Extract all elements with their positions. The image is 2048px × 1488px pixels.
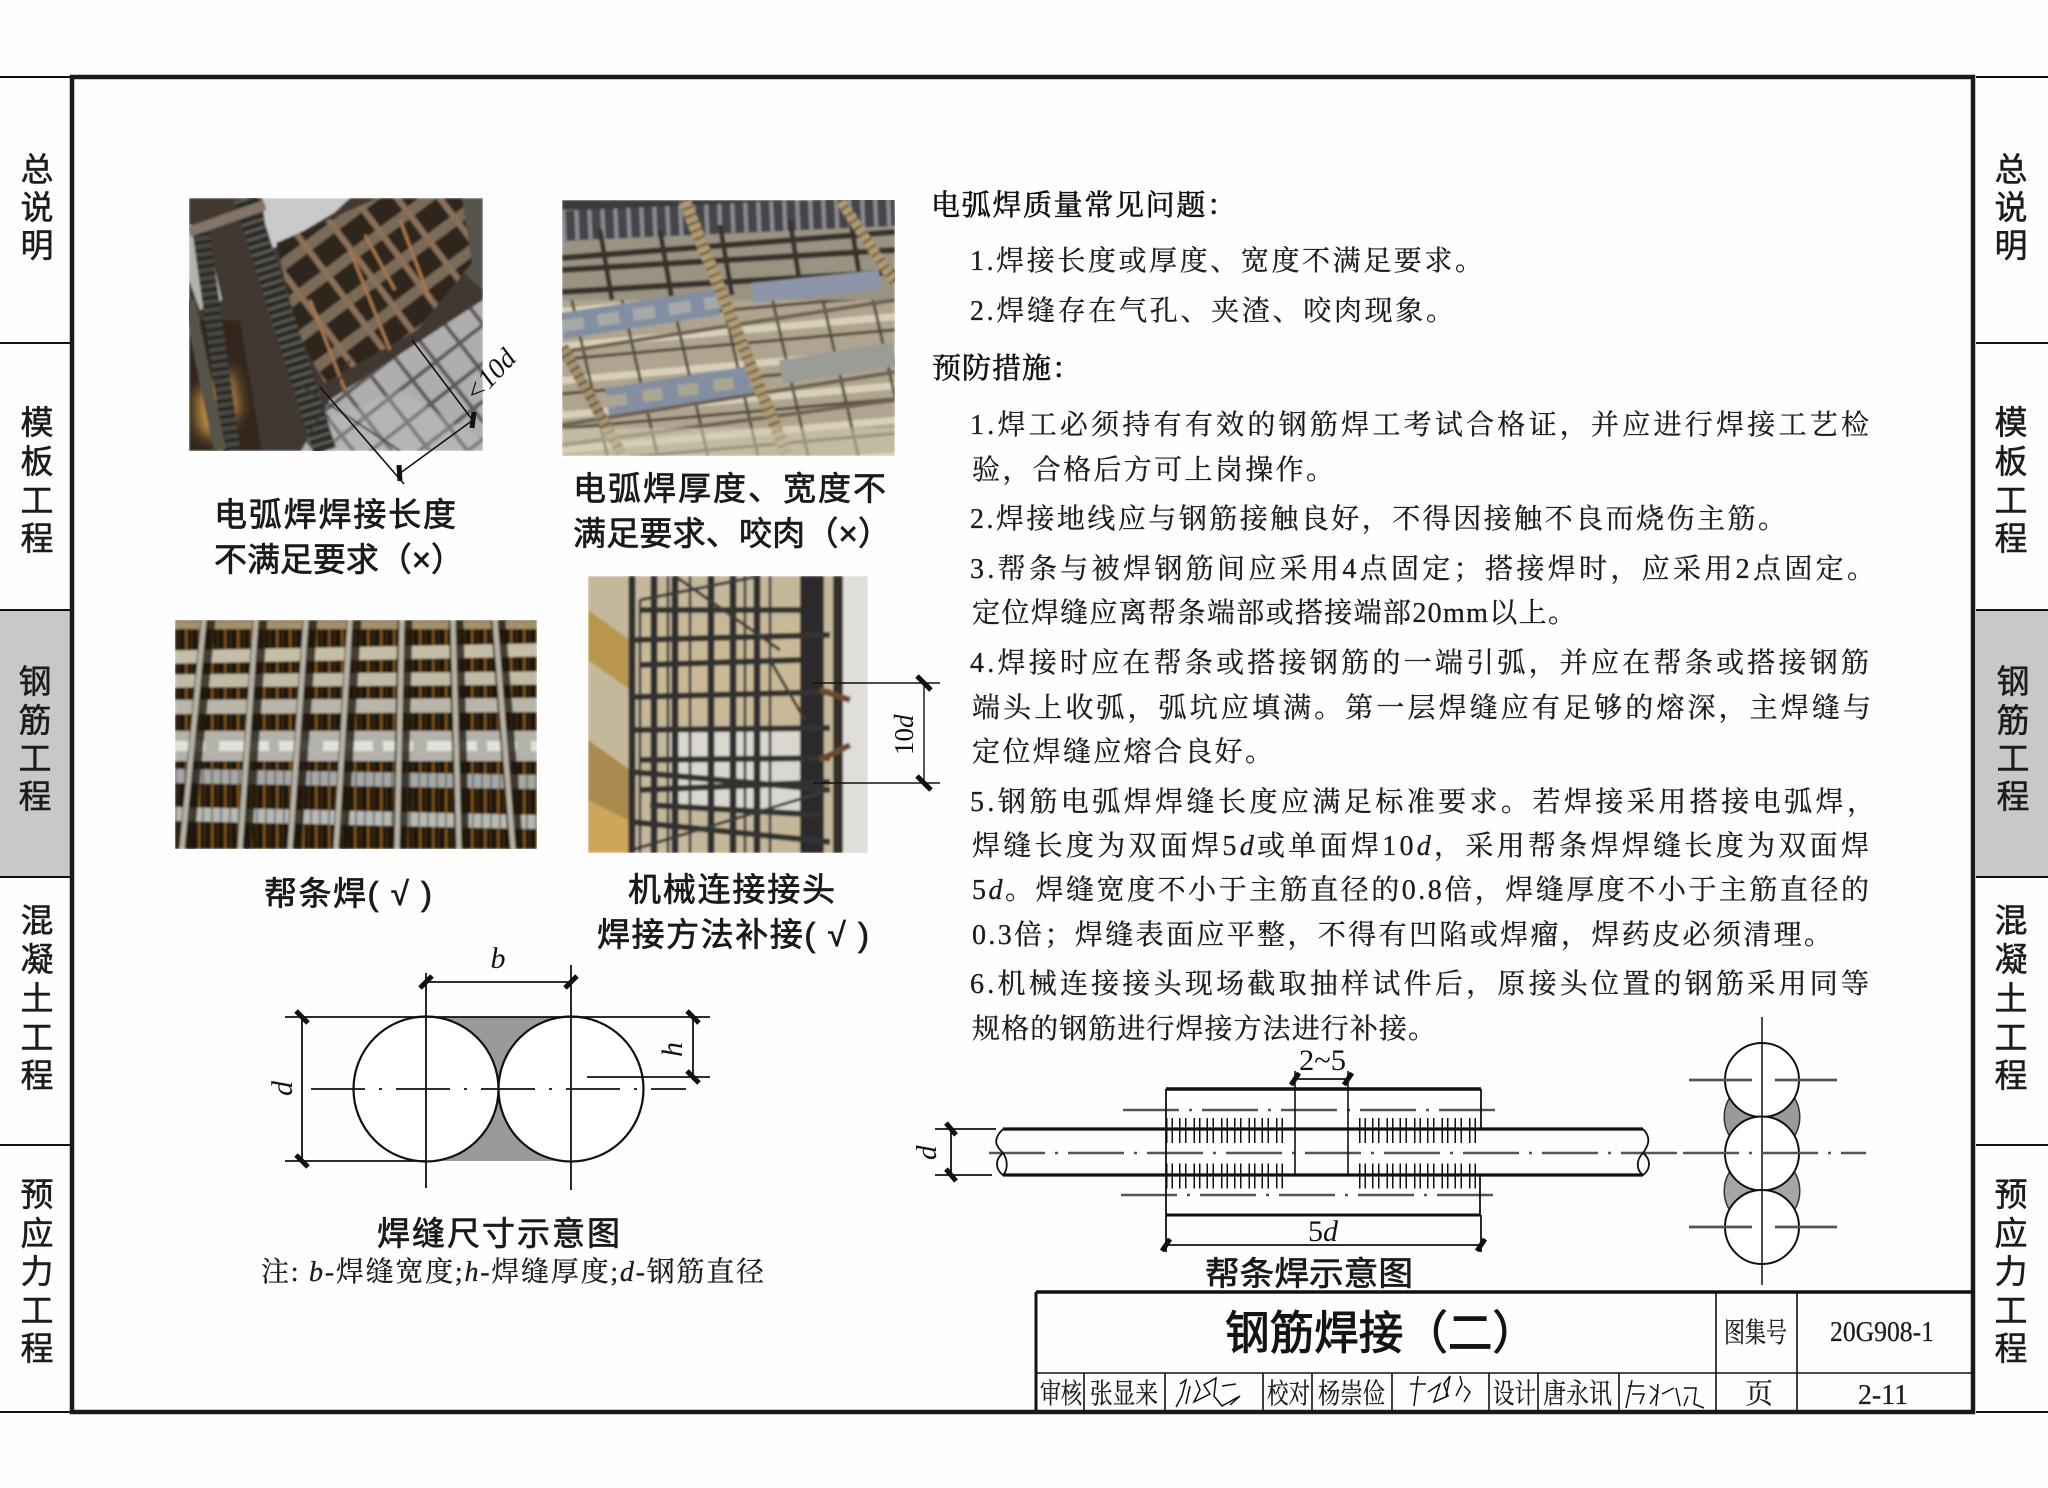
right side tabs: 工 [1996, 740, 2030, 777]
diagram: weld dimensions: d [266, 1080, 299, 1096]
atlas number [1724, 1317, 1934, 1349]
caption: side bar welding: 帮条焊( √ ) [264, 875, 432, 912]
list: prevention measures: 5.钢筋电弧焊焊缝长度应满足标准要求。若焊接采用搭接电弧焊， [970, 786, 1875, 818]
review row: 杨崇俭 [1318, 1378, 1385, 1410]
right side tabs: 说 [1994, 189, 2028, 226]
caption: thickness and width insufficient: 满足要求、咬肉（×） [573, 515, 891, 552]
right side tabs: 程 [1996, 778, 2030, 815]
left side tabs: 应 [20, 1215, 54, 1252]
caption: weld length insufficient [214, 496, 464, 578]
list: prevention measures: 焊缝长度为双面焊5d或单面焊10d，采用帮条焊焊缝长度为双面焊 [972, 830, 1869, 862]
page number: 页 [1745, 1379, 1773, 1410]
right side tabs: 筋 [1996, 702, 2030, 739]
left side tabs: 程 [20, 1057, 54, 1094]
right side tabs: 凝 [1994, 941, 2028, 978]
list: prevention measures: 定位焊缝应熔合良好。 [972, 736, 1273, 768]
left side tabs: 明 [20, 227, 54, 264]
right side tabs: 工 [1994, 1292, 2028, 1329]
annotation: less than 10d: <10d [458, 342, 523, 409]
review row: 设计 [1493, 1378, 1536, 1410]
left side tabs: 程 [20, 520, 54, 557]
right side tabs: 总 [1994, 151, 2028, 188]
photo: weld thickness and width insufficient [562, 200, 895, 456]
left side tabs: 工 [20, 1019, 54, 1056]
photo: weld length insufficient [189, 198, 523, 484]
atlas number: 20G908-1 [1830, 1317, 1934, 1348]
left side tabs: 工 [18, 740, 52, 777]
heading: prevention measures: 预防措施： [932, 352, 1081, 385]
annotation: less than 10d [320, 340, 523, 484]
caption: thickness and width insufficient: 电弧焊厚度、宽度不 [573, 470, 886, 507]
left side tabs: 程 [18, 778, 52, 815]
left side tabs [0, 77, 72, 1412]
left side tabs: 程 [20, 1330, 54, 1367]
right side tabs: 预 [1994, 1176, 2028, 1213]
review row: 张显来 [1090, 1378, 1158, 1410]
list: prevention measures: 5d。焊缝宽度不小于主筋直径的0.8倍，焊缝厚度不小于主筋直径的 [972, 874, 1869, 906]
diagram: side bar weld elevation: d [911, 1145, 943, 1160]
list: prevention measures: 4.焊接时应在帮条或搭接钢筋的一端引弧，并应在帮条或搭接钢筋 [970, 647, 1869, 679]
right side tabs: 工 [1994, 482, 2028, 519]
list: common problems [970, 245, 1483, 327]
left side tabs: 总 [20, 151, 54, 188]
caption: side bar weld diagram: 帮条焊示意图 [1205, 1255, 1413, 1292]
signature one [1176, 1378, 1240, 1407]
diagram: weld dimensions: h [656, 1042, 689, 1057]
list: prevention measures: 1.焊工必须持有有效的钢筋焊工考试合格证，并应进行焊接工艺检 [970, 409, 1869, 441]
page number: 2-11 [1858, 1380, 1908, 1411]
review row: 唐永讯 [1543, 1378, 1612, 1410]
review row: 校对 [1267, 1378, 1310, 1410]
note: symbol legend: 注: b-焊缝宽度;h-焊缝厚度;d-钢筋直径 [261, 1256, 764, 1288]
list: common problems: 2.焊缝存在气孔、夹渣、咬肉现象。 [970, 295, 1454, 327]
list: prevention measures: 3.帮条与被焊钢筋间应采用4点固定；搭接焊时，应采用2点固定。 [970, 553, 1875, 585]
caption: thickness and width insufficient [573, 470, 891, 552]
heading: common quality problems: 电弧焊质量常见问题： [931, 189, 1236, 222]
caption: weld length insufficient: 不满足要求（×） [214, 541, 464, 578]
right side tabs: 明 [1994, 227, 2028, 264]
left side tabs: 模 [20, 404, 54, 441]
diagram: weld dimensions [266, 942, 710, 1190]
photo: side bar welding [175, 620, 537, 849]
right side tabs: 程 [1994, 1057, 2028, 1094]
left side tabs: 凝 [20, 941, 54, 978]
right side tabs [1976, 77, 2048, 1412]
left side tabs: 土 [20, 980, 54, 1017]
diagram: side bar weld elevation: 5d [1308, 1215, 1339, 1248]
diagram: weld dimensions: b [490, 942, 506, 975]
left side tabs: 筋 [18, 702, 52, 739]
dimension: 10d: 10d [889, 714, 919, 755]
signature two [1410, 1376, 1470, 1406]
diagram: side bar weld elevation [911, 1044, 1678, 1252]
right side tabs: 模 [1994, 404, 2028, 441]
left side tabs: 预 [20, 1176, 54, 1213]
review row: 审核 [1040, 1378, 1083, 1410]
right side tabs: 混 [1994, 902, 2028, 939]
right side tabs: 板 [1994, 443, 2028, 480]
left side tabs: 工 [20, 1292, 54, 1329]
caption: mechanical joint: 机械连接接头 [628, 871, 835, 908]
left side tabs: 板 [20, 443, 54, 480]
right side tabs: 工 [1994, 1019, 2028, 1056]
diagram: side bar weld section [1683, 1017, 1866, 1285]
drawing title: 钢筋焊接（二） [1225, 1307, 1537, 1359]
list: prevention measures: 2.焊接地线应与钢筋接触良好，不得因接触不良而烧伤主筋。 [970, 503, 1786, 535]
right side tabs: 土 [1994, 980, 2028, 1017]
list: prevention measures: 6.机械连接接头现场截取抽样试件后，原接头位置的钢筋采用同等 [970, 968, 1869, 1000]
review row [1040, 1378, 1612, 1410]
dimension: 10d [813, 676, 940, 790]
list: common problems: 1.焊接长度或厚度、宽度不满足要求。 [970, 245, 1483, 277]
list: prevention measures: 验，合格后方可上岗操作。 [972, 454, 1334, 486]
list: prevention measures: 端头上收弧，弧坑应填满。第一层焊缝应有足够的熔深，主焊缝与 [972, 692, 1871, 724]
left side tabs: 力 [20, 1253, 54, 1290]
caption: mechanical joint [597, 871, 869, 953]
atlas number: 图集号 [1724, 1317, 1787, 1349]
title block [1036, 1292, 1973, 1412]
caption: mechanical joint: 焊接方法补接( √ ) [597, 916, 869, 953]
right side tabs: 应 [1994, 1215, 2028, 1252]
list: prevention measures: 规格的钢筋进行焊接方法进行补接。 [972, 1013, 1436, 1045]
caption: weld dimensions diagram: 焊缝尺寸示意图 [377, 1215, 620, 1252]
left side tabs: 钢 [18, 663, 52, 700]
left side tabs: 工 [20, 482, 54, 519]
right side tabs: 程 [1994, 520, 2028, 557]
photo: mechanical joint welded repair [588, 576, 940, 853]
caption: weld length insufficient: 电弧焊焊接长度 [214, 496, 456, 533]
page number [1745, 1379, 1908, 1411]
right side tabs: 程 [1994, 1330, 2028, 1367]
list: prevention measures: 0.3倍；焊缝表面应平整，不得有凹陷或焊瘤，焊药皮必须清理。 [972, 919, 1832, 951]
list: prevention measures [970, 409, 1875, 1045]
left side tabs: 说 [20, 189, 54, 226]
left side tabs: 混 [20, 902, 54, 939]
diagram: side bar weld elevation: 2~5 [1299, 1044, 1346, 1077]
right side tabs: 钢 [1996, 663, 2030, 700]
signature three [1626, 1380, 1704, 1408]
list: prevention measures: 定位焊缝应离帮条端部或搭接端部20mm以上。 [972, 597, 1576, 629]
right side tabs: 力 [1994, 1253, 2028, 1290]
